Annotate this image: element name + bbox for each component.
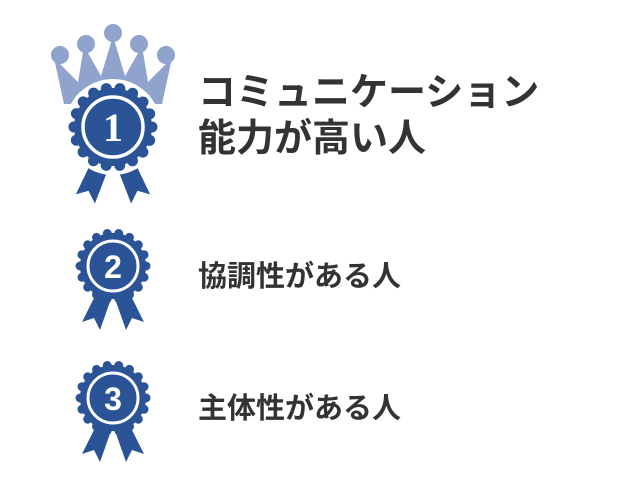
badge 3: 3 (104, 381, 122, 417)
heading: rank 1: 能力が高い人 (198, 118, 426, 160)
heading: rank 1: コミュニケーション (198, 72, 539, 114)
badge 2: 2 (104, 249, 122, 285)
badge 1 (65, 79, 161, 206)
text: rank 3: 主体性がある人 (198, 393, 401, 425)
badge 1: 1 (103, 105, 123, 150)
icon: crown (51, 24, 175, 104)
badge 3 (80, 365, 146, 462)
heading: rank 1 (198, 72, 539, 160)
badge 2 (80, 233, 146, 330)
text: rank 2: 協調性がある人 (198, 261, 401, 293)
